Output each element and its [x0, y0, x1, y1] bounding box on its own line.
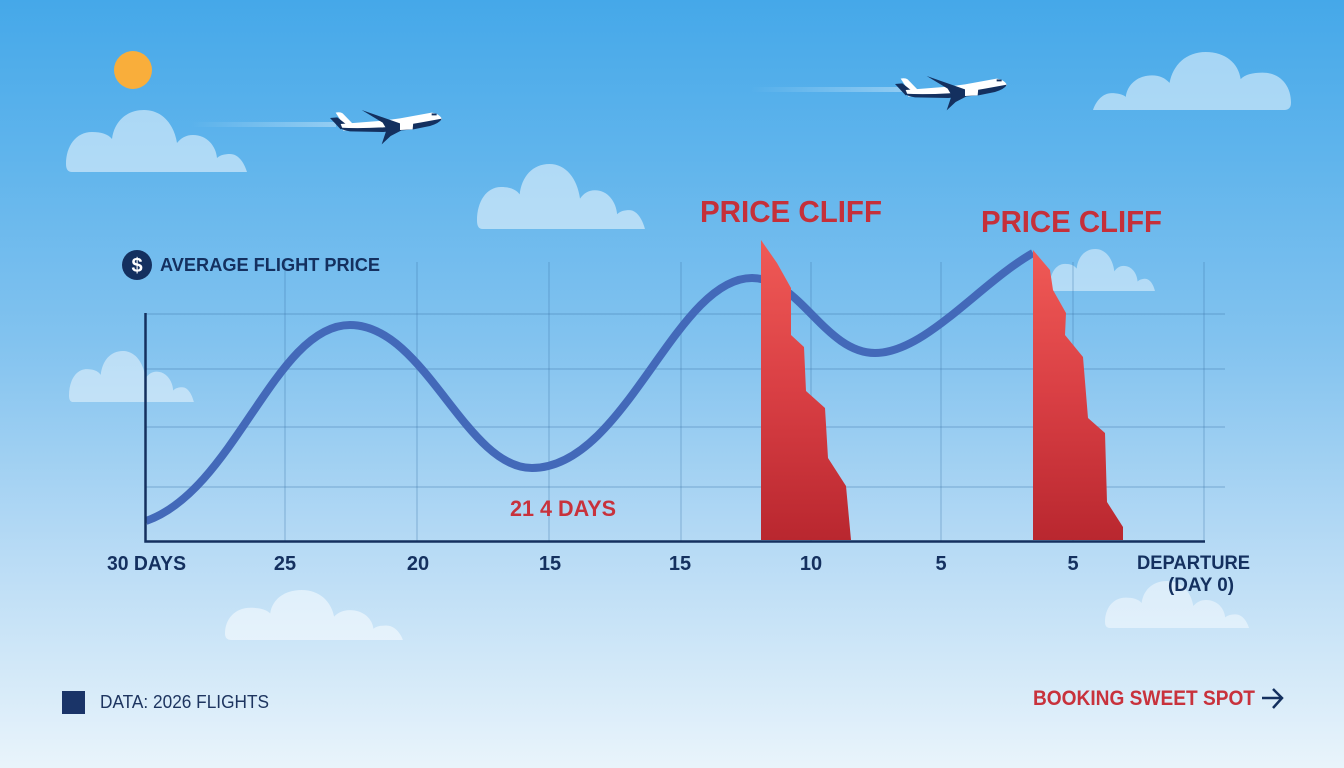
icon: dollar: $: [131, 255, 143, 277]
x axis labels: 20: [407, 553, 429, 575]
icon: dollar: [122, 250, 152, 280]
price curve: [146, 253, 1033, 521]
callout: booking sweet spot: BOOKING SWEET SPOT: [1033, 687, 1255, 710]
x axis labels: 30 DAYS: [107, 553, 186, 575]
cloud top center: [477, 164, 645, 229]
x axis labels: 15: [539, 553, 561, 575]
chart: price over days to departure: [146, 240, 1225, 542]
price cliff 1 area: [761, 240, 851, 540]
airplane left: [190, 110, 442, 144]
cloud lower left: [225, 590, 403, 640]
icon: sun: [114, 51, 152, 89]
x axis labels: 10: [800, 553, 822, 575]
x axis labels: 25: [274, 553, 296, 575]
legend: data source: DATA: 2026 FLIGHTS: [100, 692, 269, 712]
x axis labels: 5: [1067, 553, 1079, 575]
x axis labels: DEPARTURE: [1137, 553, 1250, 574]
cloud top left: [66, 110, 247, 172]
label: sweet spot days: 21 4 DAYS: [510, 496, 616, 521]
x axis labels: [107, 553, 1250, 596]
label: price cliff 1: PRICE CLIFF: [700, 194, 882, 229]
x axis labels: 15: [669, 553, 691, 575]
x axis labels: 5: [935, 553, 947, 575]
cloud top right: [1093, 52, 1291, 110]
airplane right: [750, 76, 1007, 110]
label: price cliff 2: PRICE CLIFF: [981, 204, 1162, 239]
cloud left of chart: [69, 351, 194, 402]
x axis labels: (DAY 0): [1168, 575, 1234, 596]
price cliff 2 area: [1033, 250, 1123, 540]
cloud lower right: [1105, 581, 1249, 628]
cloud behind second cliff: [1050, 249, 1155, 291]
axes: [146, 313, 1205, 542]
legend: data source: [62, 691, 269, 714]
y axis title: AVERAGE FLIGHT PRICE: [160, 255, 380, 275]
